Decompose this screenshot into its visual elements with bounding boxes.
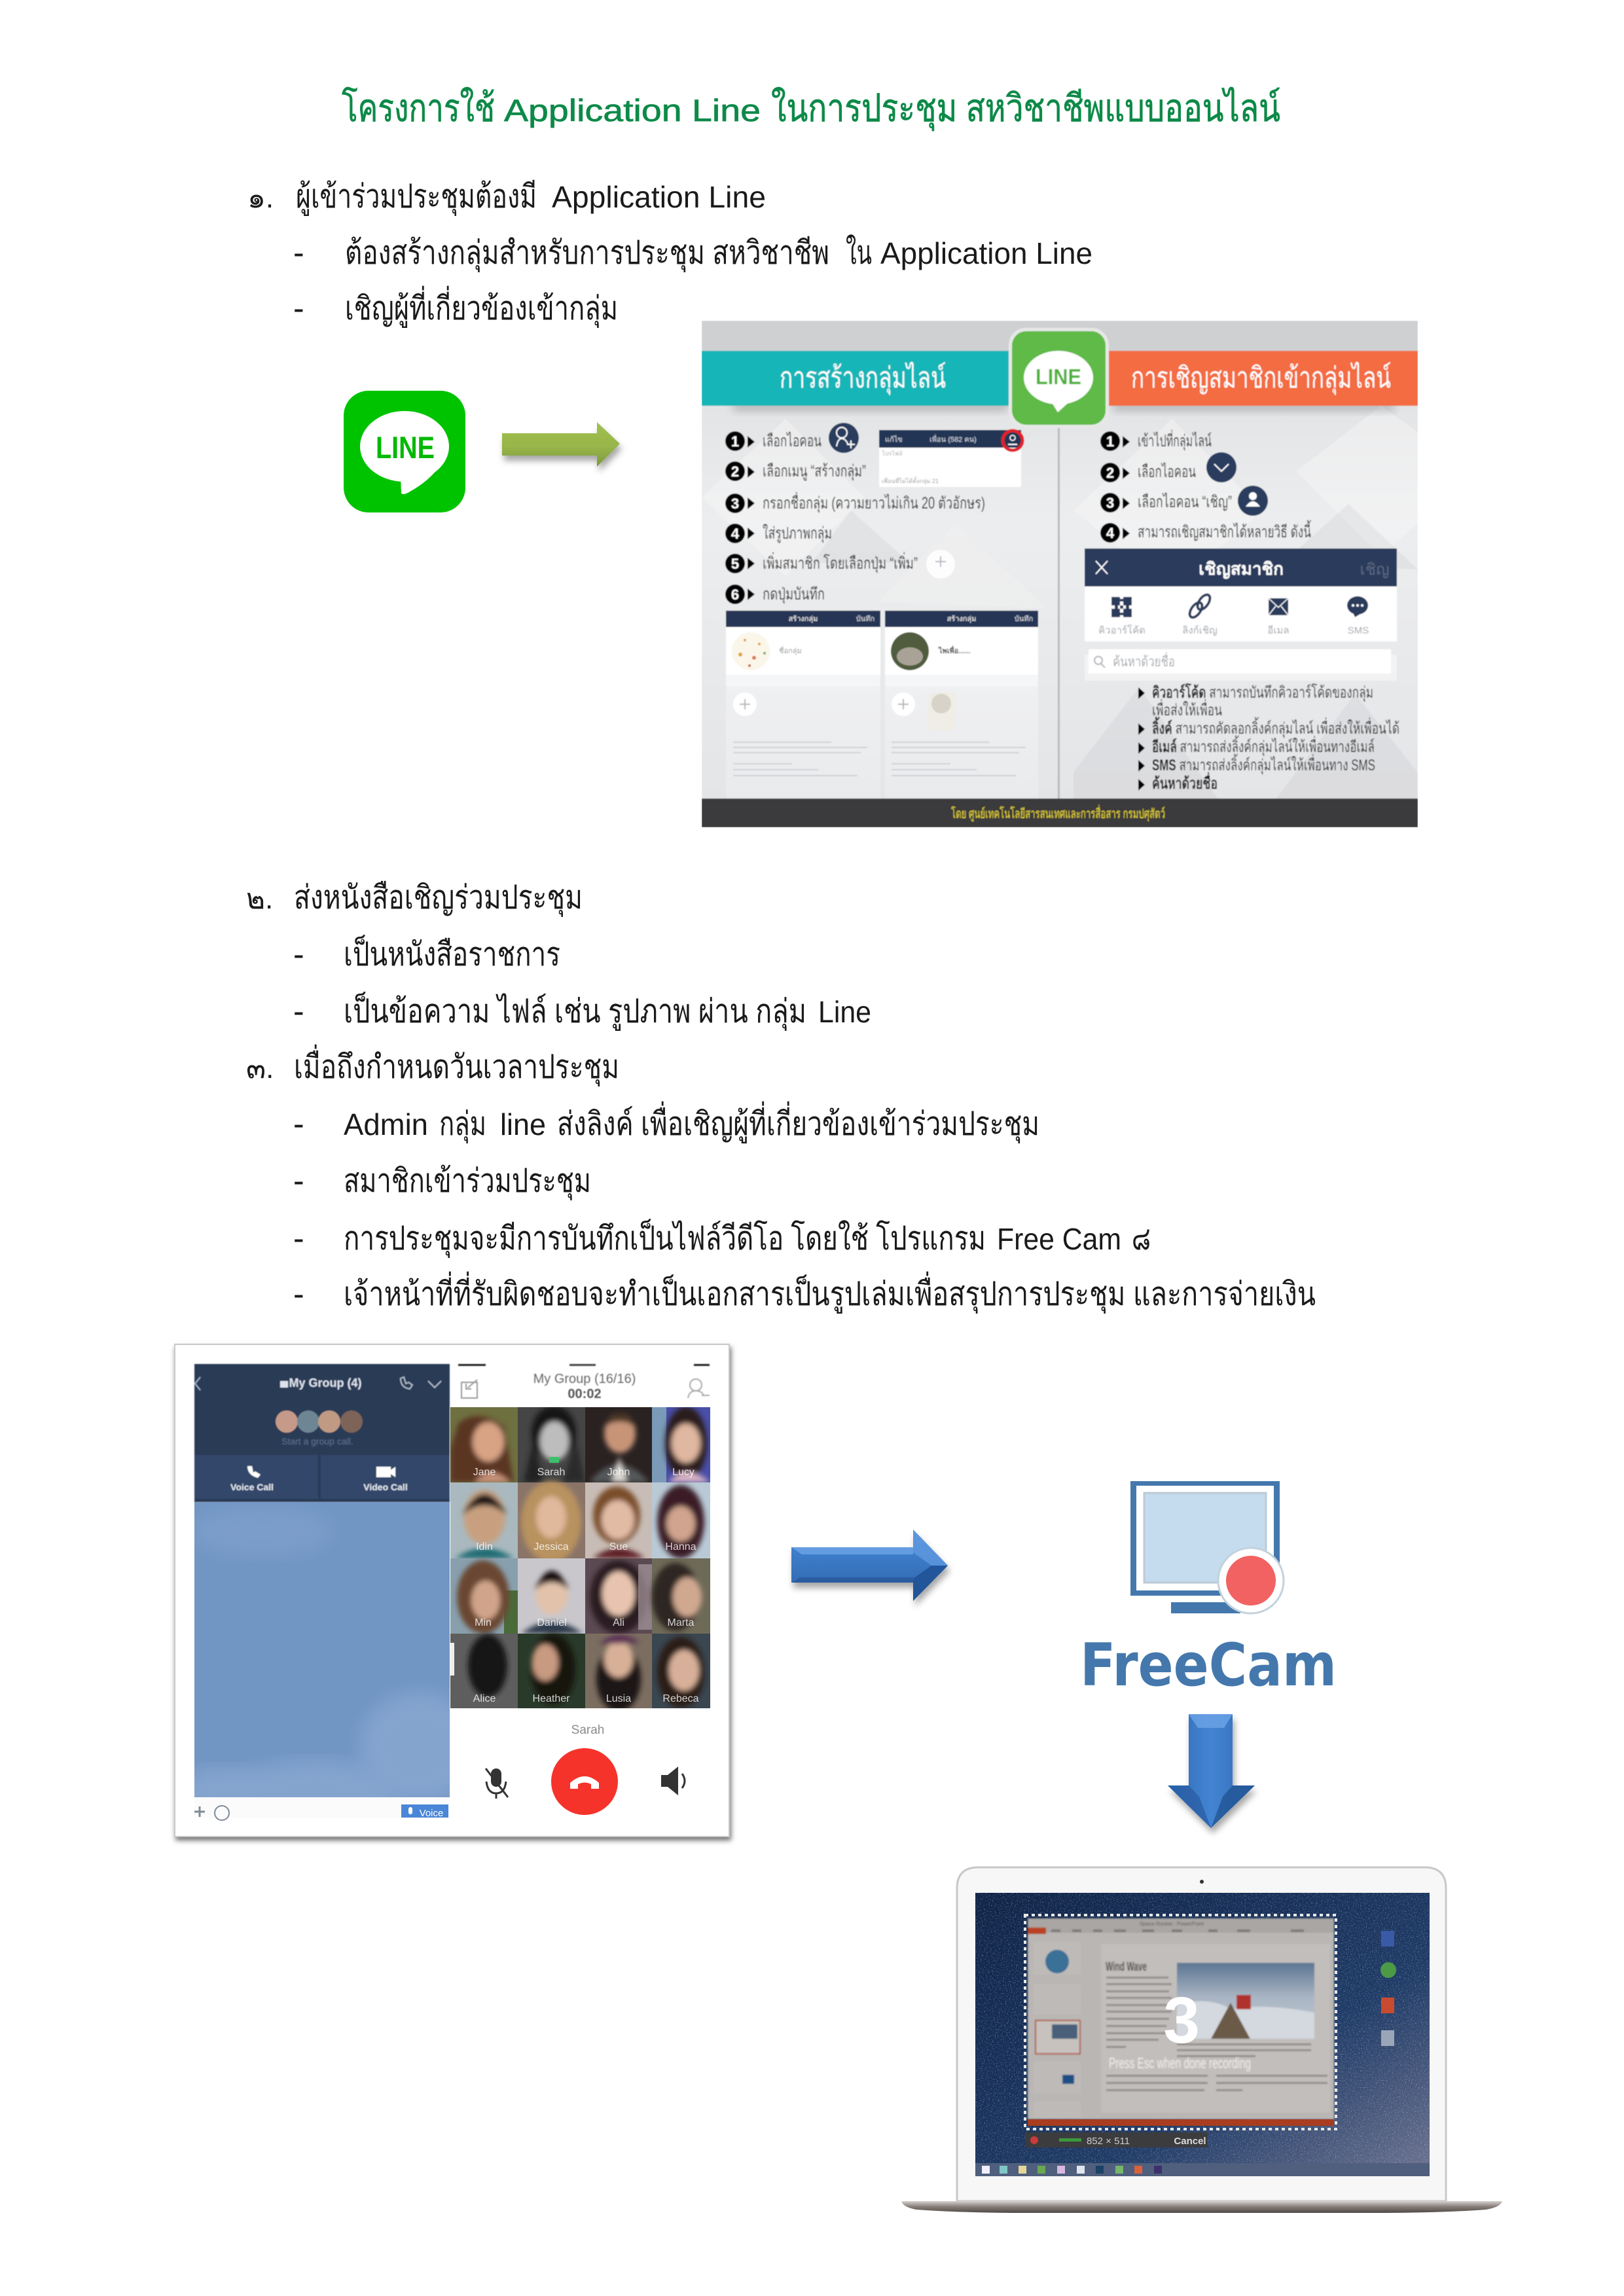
invite methods list bbox=[1138, 683, 1399, 793]
dash bullet: - bbox=[293, 290, 304, 327]
title: ในการประชุม สหวิชาชีพแบบออนไลน์ bbox=[771, 86, 1280, 132]
caller name: Sarah bbox=[571, 1723, 604, 1737]
step 6: 6 bbox=[731, 586, 739, 603]
item 3 label: เมื่อถึงกำหนดวันเวลาประชุม bbox=[294, 1045, 619, 1086]
invite member sheet: เชิญ bbox=[1360, 561, 1389, 579]
title: โครงการใช้ bbox=[342, 86, 495, 130]
participant: Rebeca: Rebeca bbox=[662, 1693, 699, 1704]
mini screenshot: friends header: โปรไฟล์ bbox=[882, 450, 903, 457]
participant: Min: Min bbox=[475, 1617, 492, 1628]
heading bar: create group: การสร้างกลุ่มไลน์ bbox=[780, 361, 946, 395]
icon: muted microphone bbox=[486, 1768, 508, 1799]
item 2 number: ๒. bbox=[246, 883, 273, 915]
icon: monitor with record dot bbox=[1130, 1481, 1284, 1613]
chat screen header: Start a group call. bbox=[281, 1436, 353, 1446]
dash bullet: - bbox=[293, 993, 304, 1030]
footer credit bar: โดย ศูนย์เทคโนโลยีสารสนเทศและการสื่อสาร กรมปศุสัตว์ bbox=[951, 804, 1165, 822]
link method: ลิ้งค์ สามารถคัดลอกลิ้งค์กลุ่มไลน์ เพื่อส่งให้เพื่อนได้ bbox=[1152, 716, 1399, 738]
step 4: สามารถเชิญสมาชิกได้หลายวิธี ดังนี้ bbox=[1138, 520, 1311, 541]
label: QR code: คิวอาร์โค้ด bbox=[1098, 624, 1146, 636]
item 1 number: ๑. bbox=[247, 182, 274, 214]
participant: Alice bbox=[450, 1634, 518, 1708]
footer credit bar bbox=[702, 798, 1418, 827]
item 1 bullet b: เชิญผู้ที่เกี่ยวข้องเข้ากลุ่ม bbox=[345, 286, 618, 328]
screenshot: LINE group call bbox=[175, 1344, 729, 1837]
title: Application Line bbox=[504, 93, 761, 128]
taskbar bbox=[975, 2163, 1430, 2176]
arrow: blue right bbox=[791, 1530, 948, 1601]
section 2 and 3 text block bbox=[246, 879, 1316, 1314]
vertical divider bbox=[1058, 419, 1060, 800]
chat screen header: Voice Call bbox=[230, 1482, 274, 1492]
item 3 bullet a: line bbox=[500, 1107, 546, 1141]
step 2: เลือกเมนู “สร้างกลุ่ม” bbox=[763, 462, 866, 481]
SMS method: SMS สามารถส่งลิ้งค์กลุ่มไลน์ให้เพื่อนทาง SMS bbox=[1152, 753, 1375, 775]
countdown numeral: 3 bbox=[1163, 1984, 1200, 2057]
icon: plus button bbox=[926, 550, 955, 579]
participant: Jessica: Jessica bbox=[533, 1541, 569, 1552]
steps: create group bbox=[725, 431, 985, 604]
participant: Heather bbox=[518, 1634, 585, 1708]
step 1: 1 bbox=[1106, 433, 1114, 450]
phone screen: empty group form: บันทึก bbox=[856, 615, 875, 623]
icon: link bbox=[1187, 592, 1212, 620]
laptop with recording screen bbox=[901, 1867, 1502, 2213]
heading bar shadows bbox=[733, 403, 1394, 410]
label: SMS: SMS bbox=[1348, 625, 1369, 636]
label: email: อีเมล bbox=[1267, 625, 1290, 636]
title bbox=[342, 86, 1280, 132]
item 1 bullet a: Application Line bbox=[880, 236, 1092, 270]
QR method: คิวอาร์โค้ด สามารถบันทึกคิวอาร์โค้ดของกลุ่ม bbox=[1152, 683, 1373, 702]
step 3 bbox=[725, 492, 985, 513]
mini screenshot: friends header bbox=[879, 430, 1022, 487]
heading bar: invite members bbox=[1106, 351, 1418, 406]
dash bullet: - bbox=[293, 936, 304, 973]
participant: Ali bbox=[585, 1558, 652, 1634]
call screen header: My Group (16/16) bbox=[533, 1372, 636, 1386]
participant: John: John bbox=[607, 1467, 630, 1478]
participant: Lusia bbox=[585, 1634, 652, 1712]
step 3: 3 bbox=[1106, 495, 1114, 511]
slide thumbnails bbox=[1034, 1942, 1081, 2117]
wordmark: FreeCam bbox=[1080, 1631, 1337, 1700]
slide title: Wind Wave bbox=[1106, 1960, 1147, 1974]
status bar bbox=[1028, 2119, 1334, 2126]
step 5: 5 bbox=[731, 556, 739, 572]
mini screenshot: friends header: เพื่อน (582 คน) bbox=[929, 434, 977, 444]
item 2 bullet b: Line bbox=[818, 995, 871, 1029]
participant: Idin bbox=[450, 1482, 518, 1558]
step 1: 1 bbox=[731, 433, 739, 450]
step 5: เพิ่มสมาชิก โดยเลือกปุ่ม “เพิ่ม” bbox=[763, 552, 918, 573]
search box bbox=[1089, 649, 1391, 673]
mini screenshot: friends header: เพื่อนที่ไม่ได้ตั้งกลุ่ม 21 bbox=[882, 476, 939, 485]
participant: Ali: Ali bbox=[613, 1617, 624, 1628]
arrow: blue down bbox=[1168, 1714, 1255, 1828]
invite member sheet bbox=[1085, 548, 1397, 681]
item 1 bullet a: ต้องสร้างกลุ่มสำหรับการประชุม สหวิชาชีพ bbox=[345, 234, 829, 272]
search method: ค้นหาด้วยชื่อ bbox=[1152, 772, 1218, 793]
icon: LINE badge: LINE bbox=[1036, 365, 1081, 389]
item 2 bullet b: เป็นข้อความ ไฟล์ เช่น รูปภาพ ผ่าน กลุ่ม bbox=[344, 992, 806, 1031]
section 1 text block bbox=[247, 178, 1092, 328]
icon: LINE app logo bbox=[344, 391, 465, 512]
step 3: กรอกชื่อกลุ่ม (ความยาวไม่เกิน 20 ตัวอักษร) bbox=[763, 492, 985, 513]
icon: speaker bbox=[661, 1767, 685, 1795]
participant: Lusia: Lusia bbox=[606, 1693, 631, 1704]
recording area bbox=[1028, 1918, 1334, 2119]
dash bullet: - bbox=[293, 234, 304, 271]
phone screen: filled group form bbox=[885, 611, 1038, 798]
invite member sheet: เชิญสมาชิก bbox=[1199, 559, 1284, 579]
step 4: 4 bbox=[1106, 525, 1115, 541]
item 3 bullet c: ๘ bbox=[1132, 1220, 1151, 1257]
phone screen: filled group form: บันทึก bbox=[1015, 615, 1033, 623]
item 1 label: Application Line bbox=[552, 180, 766, 214]
dash bullet: - bbox=[293, 1276, 304, 1312]
step 4: ใส่รูปภาพกลุ่ม bbox=[763, 524, 832, 543]
recorder toolbar: 852 × 511 bbox=[1087, 2136, 1130, 2147]
chat input bar: Voice bbox=[420, 1808, 443, 1819]
phone screen: filled group form: ไพเพื่อ...... bbox=[937, 645, 971, 655]
step 2 bbox=[1100, 462, 1196, 482]
step 1 bbox=[1100, 429, 1212, 451]
step 1: เข้าไปที่กลุ่มไลน์ bbox=[1138, 429, 1212, 451]
phone screen: empty group form bbox=[726, 611, 880, 798]
step 2: เลือกไอคอน bbox=[1138, 462, 1196, 481]
logo: FreeCam bbox=[1080, 1481, 1337, 1700]
item 2 bullet a: เป็นหนังสือราชการ bbox=[344, 935, 560, 973]
recorder toolbar: Cancel bbox=[1174, 2136, 1206, 2147]
step 5 bbox=[725, 552, 918, 573]
step 4 bbox=[725, 524, 832, 543]
dash bullet: - bbox=[293, 1162, 304, 1199]
item 1 bullet a: ใน bbox=[846, 234, 872, 271]
QR method continued: เพื่อส่งให้เพื่อน bbox=[1152, 699, 1222, 719]
item 3 number: ๓. bbox=[246, 1052, 274, 1085]
icon: hang up button bbox=[551, 1748, 618, 1815]
dash bullet: - bbox=[293, 1220, 304, 1257]
call screen header: 00:02 bbox=[568, 1387, 602, 1401]
step 3: 3 bbox=[731, 495, 739, 512]
recording area: Space Rocket - PowerPoint bbox=[1140, 1921, 1204, 1927]
participant: Heather: Heather bbox=[533, 1693, 570, 1704]
item 1 label: ผู้เข้าร่วมประชุมต้องมี bbox=[296, 178, 537, 216]
participant: Sarah: Sarah bbox=[537, 1467, 565, 1478]
participant: Hanna: Hanna bbox=[665, 1541, 696, 1552]
heading bar: create group bbox=[702, 351, 1009, 406]
step 2 bbox=[725, 461, 866, 481]
chat screen header: Video Call bbox=[363, 1482, 408, 1492]
step 6 bbox=[725, 584, 825, 604]
item 3 bullet c: การประชุมจะมีการบันทึกเป็นไฟล์วีดีโอ โดยใช้ โปรแกรม bbox=[344, 1219, 986, 1258]
participant: Hanna bbox=[652, 1482, 710, 1558]
dash bullet: - bbox=[293, 1105, 304, 1142]
participant: Lucy: Lucy bbox=[672, 1467, 695, 1478]
mini screenshot: friends header: แก้ไข bbox=[885, 435, 903, 444]
item 3 bullet a: กลุ่ม bbox=[439, 1105, 486, 1143]
step 1: เลือกไอคอน bbox=[763, 431, 821, 450]
participant: Sarah bbox=[518, 1406, 585, 1482]
participant: Marta bbox=[652, 1558, 710, 1634]
desktop icons bbox=[1380, 1931, 1396, 2046]
participant: Jane bbox=[450, 1407, 518, 1482]
step 3: เลือกไอคอน “เชิญ” bbox=[1138, 492, 1232, 511]
icon: add friend bbox=[829, 423, 859, 453]
participant: Lucy bbox=[652, 1407, 710, 1482]
dashed selection frame bbox=[1025, 1915, 1336, 2129]
step 2: 2 bbox=[731, 463, 739, 480]
participant: Jessica bbox=[518, 1481, 585, 1562]
icon: LINE badge bbox=[1009, 328, 1109, 428]
slide photo bbox=[1177, 1963, 1314, 2039]
phone screen: empty group form: ชื่อกลุ่ม bbox=[779, 645, 802, 655]
participant: Idin: Idin bbox=[476, 1541, 493, 1552]
search box: ค้นหาด้วยชื่อ bbox=[1113, 652, 1175, 670]
participant: Sue: Sue bbox=[609, 1541, 628, 1552]
step 3 bbox=[1100, 492, 1232, 512]
participant: Alice: Alice bbox=[473, 1693, 496, 1704]
item 3 bullet d: เจ้าหน้าที่ที่รับผิดชอบจะทำเป็นเอกสารเป็นรูปเล่มเพื่อสรุปการประชุม และการจ่ายเงิน bbox=[344, 1272, 1316, 1314]
participant: Marta: Marta bbox=[668, 1617, 695, 1628]
item 3 bullet b: สมาชิกเข้าร่วมประชุม bbox=[344, 1162, 591, 1200]
participant: John bbox=[585, 1407, 652, 1482]
step 2: 2 bbox=[1106, 465, 1114, 481]
icon: email bbox=[1269, 598, 1288, 615]
status message: Press Esc when done recording bbox=[1109, 2054, 1251, 2072]
step 4: 4 bbox=[731, 526, 740, 542]
email method: อีเมล์ สามารถส่งลิ้งค์กลุ่มไลน์ให้เพื่อนทางอีเมล์ bbox=[1152, 735, 1375, 757]
laptop base bbox=[901, 2201, 1502, 2213]
desktop screen bbox=[975, 1893, 1430, 2176]
page canvas bbox=[171, 86, 1502, 2213]
icon: LINE app logo: LINE bbox=[376, 430, 435, 465]
arrow: green right bbox=[502, 422, 620, 467]
chat screen header: My Group (4) bbox=[289, 1376, 362, 1390]
icon: QR code bbox=[1111, 597, 1132, 617]
phone screen: filled group form: สร้างกลุ่ม bbox=[947, 615, 976, 623]
chat input bar bbox=[194, 1797, 450, 1820]
participant video grid bbox=[450, 1406, 710, 1712]
participant: Sue bbox=[585, 1482, 652, 1558]
call screen header bbox=[458, 1364, 710, 1401]
participant: Daniel bbox=[518, 1558, 585, 1634]
item 1 label bbox=[296, 178, 766, 216]
item 3 bullet a: ส่งลิงค์ เพื่อเชิญผู้ที่เกี่ยวข้องเข้าร่วมประชุม bbox=[557, 1102, 1039, 1143]
icon: invite button bbox=[1238, 486, 1268, 516]
phone screen: empty group form: สร้างกลุ่ม bbox=[789, 615, 818, 623]
icon: chevron button bbox=[1206, 452, 1236, 482]
chat screen header bbox=[194, 1364, 450, 1502]
step 1 bbox=[725, 431, 821, 451]
panel: LINE group how-to infographic bbox=[702, 321, 1418, 827]
heading bar: invite members: การเชิญสมาชิกเข้ากลุ่มไลน์ bbox=[1131, 361, 1391, 395]
item 2 label: ส่งหนังสือเชิญร่วมประชุม bbox=[294, 879, 583, 917]
steps: invite members bbox=[1100, 429, 1311, 543]
item 3 bullet a: Admin bbox=[344, 1107, 428, 1141]
participant: Daniel: Daniel bbox=[537, 1617, 567, 1628]
item 3 bullet a bbox=[344, 1102, 1039, 1143]
item 3 bullet c: Free Cam bbox=[997, 1222, 1121, 1256]
icon: SMS bbox=[1347, 596, 1368, 617]
participant: Rebeca bbox=[652, 1634, 710, 1708]
step 6: กดปุ่มบันทึก bbox=[763, 585, 825, 604]
participant: Min bbox=[450, 1558, 518, 1634]
recorder toolbar bbox=[1025, 2132, 1208, 2147]
participant: Jane: Jane bbox=[473, 1467, 496, 1478]
step 4 bbox=[1100, 520, 1311, 543]
label: invite link: ลิงก์เชิญ bbox=[1182, 625, 1218, 636]
chat wallpaper with clouds bbox=[177, 1502, 478, 1826]
